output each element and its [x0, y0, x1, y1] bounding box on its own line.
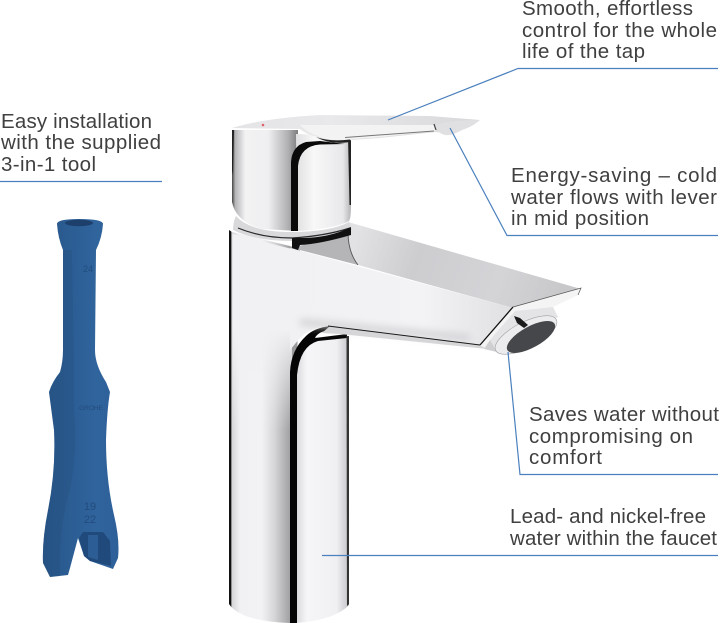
spout shadowed recess	[292, 232, 358, 265]
callout line: installation	[0, 180, 162, 182]
lever tip	[435, 120, 480, 135]
text: energy saving: Energy-saving – cold	[511, 164, 717, 187]
cartridge black stripe	[291, 141, 345, 231]
callout line: saves water	[508, 352, 718, 474]
tool shaded side	[43, 250, 75, 577]
spout crease shading	[300, 322, 470, 338]
text: smooth control	[522, 0, 717, 63]
text: saves water: compromising on	[529, 425, 693, 448]
collar	[233, 216, 352, 241]
aerator	[484, 307, 562, 362]
tool marking: size 22: 22	[84, 514, 96, 526]
tool marking: logo: GROHE	[79, 405, 104, 412]
tool socket	[65, 220, 93, 226]
spout top face	[348, 222, 581, 308]
column upper highlight	[232, 234, 292, 430]
text: saves water	[529, 403, 719, 469]
spout nose rim	[480, 288, 581, 349]
collar black band	[292, 227, 351, 250]
lever handle	[232, 115, 480, 141]
stem right edge	[346, 336, 349, 606]
3-in-1 tool	[43, 219, 118, 577]
text: lead free	[509, 505, 717, 550]
faucet	[229, 115, 581, 623]
mixer cartridge	[232, 130, 298, 231]
tool marking: size 19: 19	[84, 501, 96, 513]
spout front face	[290, 248, 513, 350]
text: smooth control: control for the whole	[522, 19, 717, 42]
faucet body column	[229, 230, 300, 623]
spout underside	[322, 326, 487, 349]
faucet stem	[296, 336, 349, 623]
callout line: lead free	[322, 554, 718, 556]
text: energy saving	[510, 164, 717, 230]
callout line: energy saving	[450, 128, 718, 236]
text: easy installation	[0, 110, 161, 176]
stem black stripe	[290, 326, 347, 623]
text: lead free: Lead- and nickel-free	[510, 505, 706, 528]
text: easy installation: with the supplied	[0, 131, 161, 154]
text: smooth control: life of the tap	[522, 40, 645, 63]
callout line: smooth control	[388, 68, 718, 120]
text: easy installation: Easy installation	[1, 110, 152, 133]
tool marking: size 24: 24	[83, 264, 93, 274]
hot cold mark	[262, 124, 264, 126]
text: saves water: comfort	[529, 446, 602, 469]
text: energy saving: in mid position	[511, 207, 649, 230]
text: easy installation: 3-in-1 tool	[1, 153, 96, 176]
text: energy saving: water flows with lever	[510, 186, 717, 209]
tool slot	[79, 532, 111, 566]
text: lead free: water within the faucet	[509, 527, 717, 550]
text: saves water: Saves water without	[529, 403, 719, 426]
